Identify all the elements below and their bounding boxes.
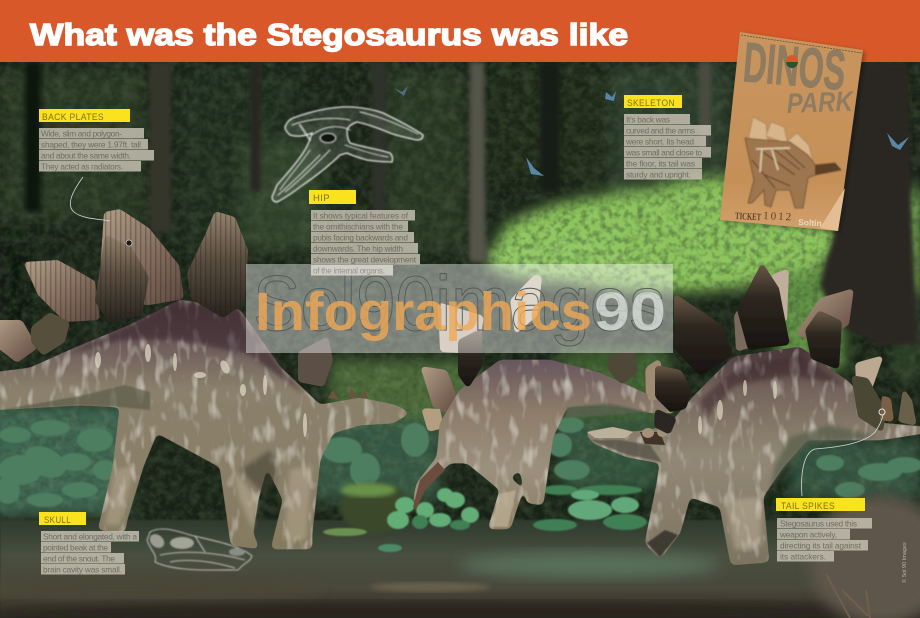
forest background [0, 62, 920, 542]
text: was small and close to [625, 148, 702, 158]
header bar [0, 0, 920, 62]
text: downwards. The hip width [313, 244, 403, 254]
text [39, 128, 154, 172]
spine nubs [328, 388, 368, 400]
ticket: Dinos Park: Soltin [798, 217, 822, 228]
text: It's back was [626, 114, 670, 124]
text: weapon actively, [779, 530, 837, 540]
label: SKULL [44, 515, 71, 526]
pale spots [95, 344, 307, 437]
label: HIP [313, 193, 330, 204]
stegosaurus: left [0, 209, 410, 549]
callout: skeleton [624, 95, 711, 180]
text: the ornithischians with the [313, 222, 403, 232]
stegosaurus: middle [411, 274, 679, 529]
ticket: Dinos Park: PARK [786, 86, 855, 119]
leader line [70, 177, 132, 246]
text: directing its tail against [780, 540, 862, 550]
ticket hole [786, 55, 798, 67]
text [624, 114, 711, 180]
callout: tail spikes [776, 409, 885, 562]
callout: skull [39, 512, 139, 574]
watermark: Infographics [255, 282, 592, 342]
text: pointed beak at the [43, 542, 108, 552]
plates front [31, 211, 248, 356]
title: What was the Stegosaurus was like [30, 17, 628, 52]
text: Stegosaurus used this [780, 518, 857, 528]
skeletal skull drawing [147, 529, 252, 570]
text [41, 531, 139, 574]
text: the floor, its tail was [626, 158, 695, 168]
watermark: Sol90images [253, 259, 665, 347]
text [777, 518, 872, 562]
text: of the internal organs. [313, 266, 385, 276]
text: brain cavity was small. [43, 564, 122, 574]
ticket number: TICKET [735, 211, 762, 223]
text: Short and elongated, with a [43, 532, 137, 542]
photo credit: © Sol 90 Images [901, 542, 908, 583]
text: pubis facing backwards and [313, 232, 408, 242]
ticket stegosaurus sketch [745, 117, 841, 208]
branches in water [826, 574, 870, 618]
text: It shows typical features of [313, 210, 409, 220]
ticket: Dinos Park: 1012 [763, 210, 793, 224]
ticket heading: DINOS [741, 30, 848, 102]
water and ground [0, 483, 920, 618]
ticket: Dinos Park [720, 30, 865, 233]
birds in the forest [394, 86, 909, 176]
bright foreground plants [378, 485, 647, 552]
text: They acted as radiators. [41, 162, 123, 172]
body [0, 300, 410, 549]
text: end of the snout. The [43, 554, 115, 564]
plates behind [0, 209, 333, 387]
stegosaurus: right [585, 262, 920, 565]
text: shaped, they were 1.97ft. tall [41, 140, 141, 150]
text: and about the same width. [41, 150, 131, 160]
label [776, 498, 865, 512]
skeletal hip drawing [272, 107, 423, 202]
watermark: 90 [594, 282, 666, 342]
text [311, 210, 420, 276]
text: shows the great development [313, 254, 417, 264]
leader line [802, 409, 885, 496]
text: were short. Its head [625, 136, 694, 146]
callout: hip [309, 190, 420, 276]
label: SKELETON [627, 98, 675, 109]
callout: back plates [39, 109, 154, 246]
text: sturdy and upright. [626, 170, 691, 180]
text: curved and the arms [626, 126, 695, 136]
label: TAIL SPIKES [781, 501, 835, 512]
foliage leaves [0, 417, 920, 507]
tree trunks [25, 62, 918, 345]
label: BACK PLATES [42, 112, 104, 123]
text: Wide, slim and polygon- [41, 128, 122, 138]
text: its attackers. [780, 552, 826, 562]
body shading [65, 300, 305, 395]
